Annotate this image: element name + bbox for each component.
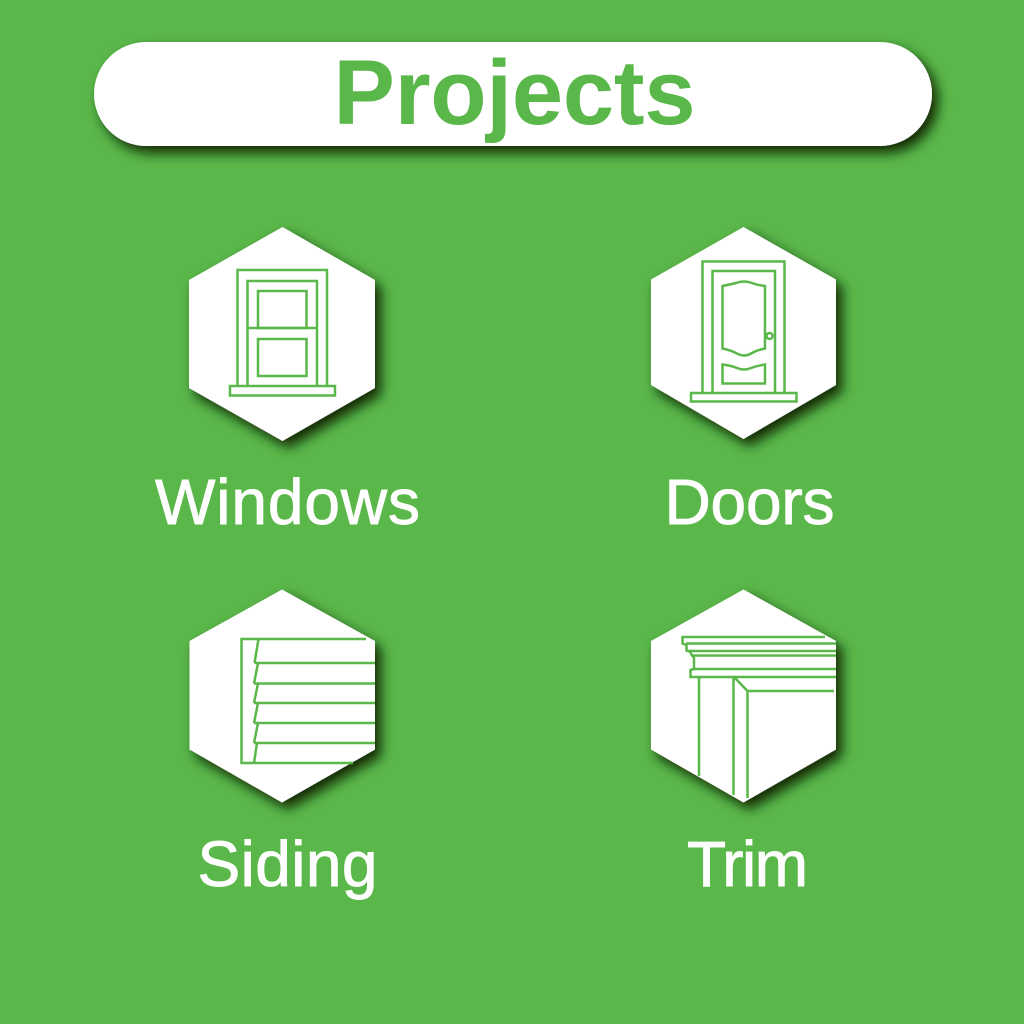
panel: siding: [190, 590, 378, 900]
title banner: [94, 42, 932, 146]
hexagon: siding: [190, 590, 375, 802]
label: windows: Windows: [155, 466, 420, 538]
label: trim: Trim: [687, 828, 808, 900]
label: doors: Doors: [664, 466, 834, 538]
hexagon: doors: [651, 227, 836, 439]
icon: siding: [242, 639, 375, 763]
title: Projects: [334, 42, 696, 144]
icon: trim: [682, 637, 836, 798]
hexagon: windows: [189, 227, 375, 441]
panel: trim: [651, 590, 836, 900]
icon: window: [230, 270, 335, 396]
hexagon: trim: [651, 590, 836, 802]
label: siding: Siding: [198, 828, 378, 900]
icon: door: [691, 262, 796, 402]
panel: windows: [155, 227, 420, 538]
panel: doors: [651, 227, 836, 538]
